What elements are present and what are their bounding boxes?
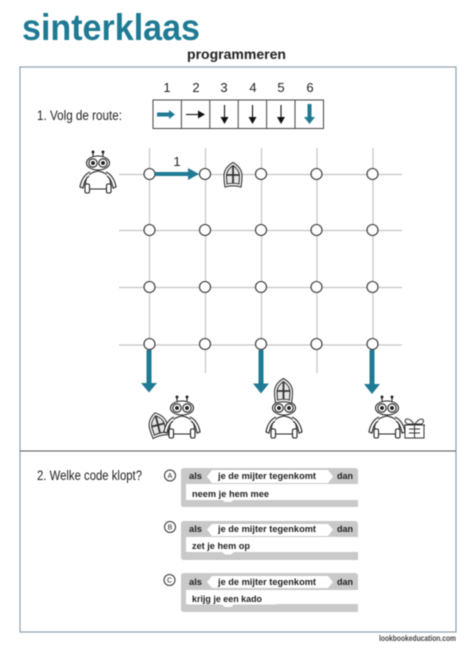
exit arrow to answer two [253, 350, 269, 394]
subtitle: programmeren [187, 47, 286, 62]
step 2 arrow [186, 114, 200, 116]
code block B: je de mijter tegenkomt [217, 524, 317, 535]
answer three: robot with gift [369, 396, 425, 438]
mitre on the grid [224, 162, 242, 187]
source credit: lookbookeducation.com [379, 634, 456, 643]
code block C: krijg je een kado [192, 594, 262, 605]
code block B: als [189, 524, 202, 535]
route step numbers: 3 [220, 80, 228, 95]
route command strip [153, 100, 324, 128]
icon: gift [404, 419, 425, 438]
code block C: dan [337, 577, 353, 588]
code block B [181, 521, 358, 560]
code block C: als [189, 577, 202, 588]
route step numbers [163, 80, 314, 95]
route grid [119, 148, 402, 373]
code block A: als [189, 471, 202, 482]
route step numbers: 2 [192, 80, 200, 95]
first move arrow with label: 1 [173, 154, 181, 169]
step 3 arrow [224, 105, 226, 119]
route step numbers: 4 [249, 80, 257, 95]
option marker A [164, 470, 176, 481]
code block A: neem je hem mee [192, 489, 269, 500]
option marker B: B [168, 524, 173, 532]
first move arrow with label [155, 154, 199, 180]
route step numbers: 1 [163, 80, 171, 95]
route step numbers: 6 [306, 80, 314, 95]
title: sinterklaas [22, 7, 200, 48]
option marker C [164, 574, 175, 586]
step 1 arrow [157, 110, 175, 119]
worksheet frame [20, 67, 456, 632]
code block B: zet je hem op [192, 541, 250, 552]
answer one: robot with mitre beside it [146, 396, 200, 439]
step 6 arrow [304, 104, 315, 124]
code block C: je de mijter tegenkomt [217, 577, 317, 588]
option B [164, 521, 358, 560]
question 1 label: 1. Volg de route: [37, 108, 122, 123]
code block A: je de mijter tegenkomt [217, 471, 317, 482]
answer two: robot wearing mitre [266, 378, 302, 438]
start robot [80, 151, 116, 193]
section divider [20, 450, 456, 452]
step 5 arrow [280, 105, 282, 119]
option marker A: A [168, 473, 173, 480]
step 4 arrow [252, 105, 254, 119]
exit arrow to answer one [141, 350, 157, 392]
route step numbers: 5 [277, 80, 285, 95]
option marker B [164, 522, 176, 532]
option marker C: C [167, 578, 172, 584]
code block B: dan [337, 524, 353, 535]
option C [164, 573, 358, 612]
grid nodes [144, 168, 378, 350]
code block C [181, 573, 358, 612]
code block A [181, 468, 358, 507]
code block A: dan [337, 471, 353, 482]
question 2 label: 2. Welke code klopt? [37, 468, 142, 483]
option A [164, 468, 358, 507]
exit arrow to answer three [364, 350, 380, 394]
